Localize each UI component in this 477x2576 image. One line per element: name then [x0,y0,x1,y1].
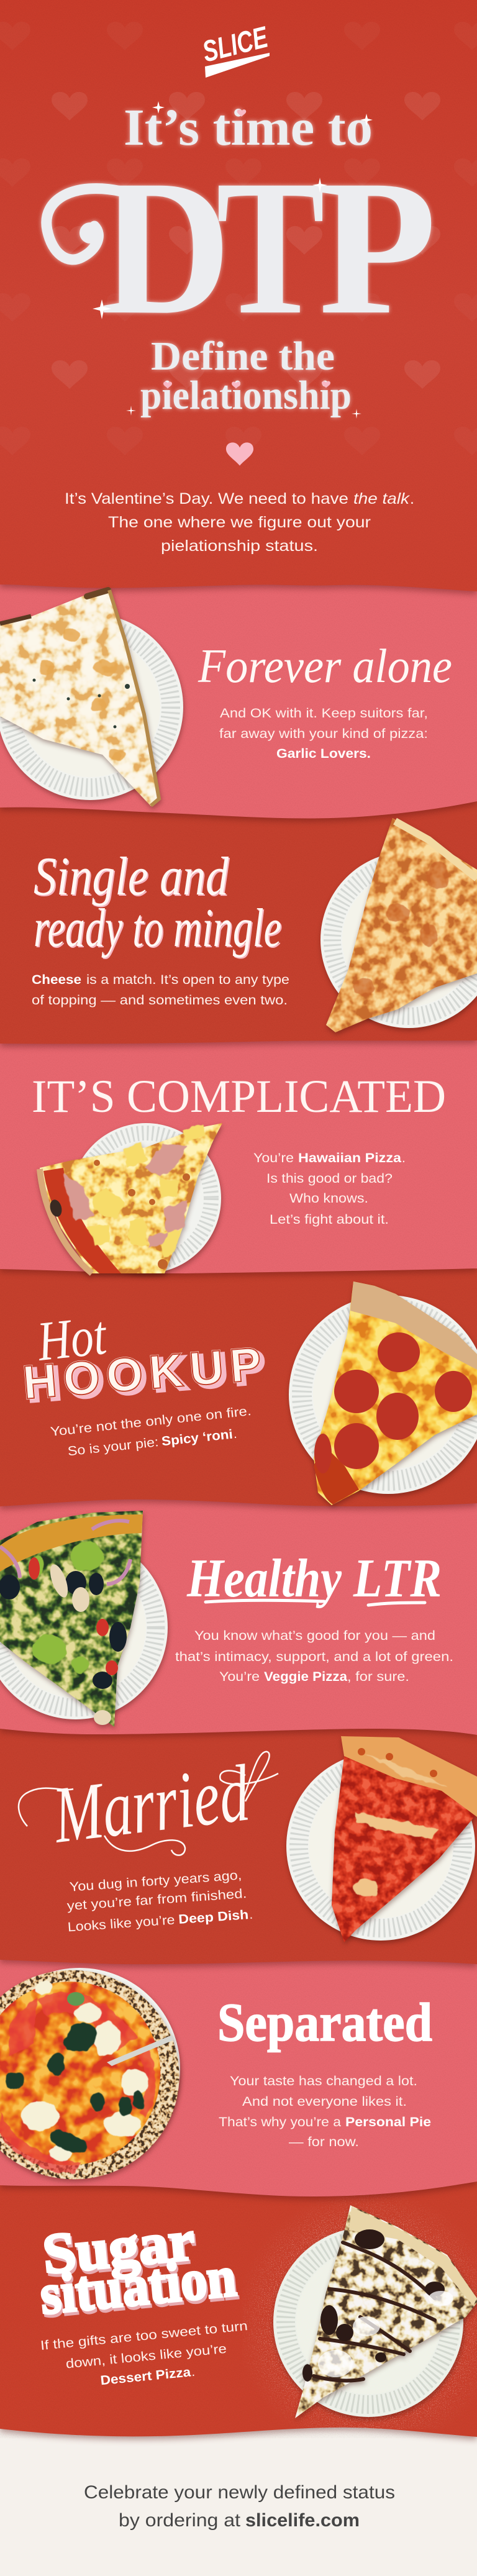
body text: Cheese [32,973,81,987]
title: married [19,1748,278,1860]
logo: slice: SLICE [199,20,272,69]
body text: , for sure. [347,1670,409,1684]
title: married: Married [48,1748,254,1860]
heading: DTP: P [319,140,437,355]
panel: hot hookup [21,1281,477,1505]
heading: DTP: T [216,140,325,355]
body text: Personal Pie [345,2115,431,2129]
body text: Your taste has changed a lot. [230,2074,417,2088]
body text [66,1868,253,1934]
body text: That’s why you’re a [219,2115,341,2129]
icons: heart dots on pielationship [163,381,330,389]
body text: You know what’s good for you — and [194,1629,435,1643]
body text: And OK with it. Keep suitors far, [220,706,428,721]
body text: And not everyone likes it. [242,2095,407,2109]
sugar dust [242,2193,477,2429]
panel: forever alone [0,589,452,806]
body text: Deep Dish [178,1908,249,1927]
body text [175,1629,453,1684]
body text: Looks like you’re [67,1913,175,1934]
title: sugar situation: Sugar [40,2208,198,2286]
title: single and ready to mingle [34,847,283,960]
body text [219,2074,431,2149]
plate and hawaiian slice [40,1123,222,1273]
body text [219,706,428,761]
intro text: the talk [353,490,411,507]
heading: it's time to: It’s time to [124,99,373,157]
plate and cheese slice [320,818,477,1032]
title: sugar situation [37,2208,240,2329]
body text: Hawaiian Pizza [298,1151,401,1165]
band background: sugar situation [0,2174,477,2437]
body text [50,1404,252,1459]
band background: single and ready to mingle [0,801,477,1044]
body text: — for now. [289,2135,359,2149]
intro text: The one where we figure out your [108,514,371,531]
body text [32,973,289,1008]
heading: DTP [47,140,437,355]
title: healthy LTR: Healthy LTR [186,1549,442,1609]
plate and veggie slice [0,1511,168,1727]
title: sugar situation: situation [37,2244,238,2326]
body text: Let’s fight about it. [270,1213,389,1227]
heading: pielationship: pielationship [140,373,352,418]
logo: slice [199,20,272,78]
personal pie with plate [0,1942,206,2207]
title: single and ready to mingle: ready to mingle [34,898,281,958]
panel: it's complicated [32,1071,446,1273]
body text: You dug in forty years ago, [69,1868,242,1895]
band background: it's complicated [0,1031,477,1273]
body text: You’re [219,1670,260,1684]
title: sugar situation: situation [39,2247,240,2329]
band background: hero [0,0,477,591]
footer call to action: Celebrate your newly defined status [84,2482,395,2503]
body text: Veggie Pizza [264,1670,347,1684]
title: sugar situation: Sugar [42,2211,199,2289]
body text [253,1151,406,1227]
body text: Is this good or bad? [266,1172,393,1186]
body text: You’re not the only one on fire. [50,1404,252,1439]
plate and pepperoni slice [289,1281,477,1505]
title: single and ready to mingle: Single and [34,847,229,907]
plate and dessert slice [273,2205,477,2418]
footer background [0,2423,477,2576]
body text: . [191,2365,196,2379]
title: hookup: HOOKUP [21,1337,263,1409]
body text: Spicy ‘roni [161,1427,234,1449]
body text: You’re [253,1151,294,1165]
body text: yet you’re far from finished. [66,1886,247,1913]
body text: So is your pie: [67,1435,159,1459]
body text: . [248,1908,253,1922]
intro text: . [410,490,414,507]
panel: married [19,1736,477,1942]
title: separated: Separated [217,1993,432,2053]
body text: far away with your kind of pizza: [219,727,428,741]
title: hookup: HOOKUP [21,1337,263,1409]
band background: separated [0,1950,477,2196]
body text: of topping — and sometimes even two. [32,993,288,1008]
body text: is a match. It’s open to any type [86,973,289,987]
title: hot: Hot [34,1303,111,1373]
band background: forever alone [0,578,477,818]
body text: . [232,1427,238,1441]
heading: define the: Define the [151,334,335,379]
title: hookup: HOOKUP [25,1340,268,1412]
band background: married [0,1721,477,1964]
faint hearts pattern [0,22,477,455]
intro text: pielationship status. [161,537,318,555]
body text: Garlic Lovers. [276,747,371,761]
band background: healthy LTR [0,1491,477,1735]
body text: Who knows. [289,1191,368,1206]
panel: single and ready to mingle [32,818,477,1032]
band background: hot hookup [0,1261,477,1506]
body text: . [402,1151,406,1165]
panel: separated [0,1942,432,2207]
body text: Dessert Pizza [100,2365,191,2388]
panel: sugar situation [37,2193,477,2429]
title: single and ready to mingle: ready to mingle [35,899,283,960]
intro text [65,490,414,555]
body text: If the gifts are too sweet to turn [40,2319,248,2353]
intro text: It’s Valentine’s Day. We need to have [65,490,348,507]
title: forever alone: Forever alone [198,640,452,693]
body text: down, it looks like you’re [65,2342,227,2371]
icon: pink heart [226,442,253,466]
panel: healthy LTR [0,1511,453,1727]
body text [40,2319,248,2388]
body text: that’s intimacy, support, and a lot of green. [175,1650,453,1664]
footer call to action [84,2482,395,2531]
icons: sparkles [93,101,373,419]
footer call to action: slicelife.com [245,2510,360,2531]
footer call to action: by ordering at [119,2510,241,2531]
title: it's complicated: IT’S COMPLICATED [32,1071,446,1122]
plate and deep dish slice [286,1736,477,1942]
heading: DTP: D [101,140,231,355]
icon: heart dot on i [237,109,246,117]
title: single and ready to mingle: Single and [35,848,230,908]
plate and garlic lovers slice [0,589,183,806]
panel: hero [0,20,477,555]
